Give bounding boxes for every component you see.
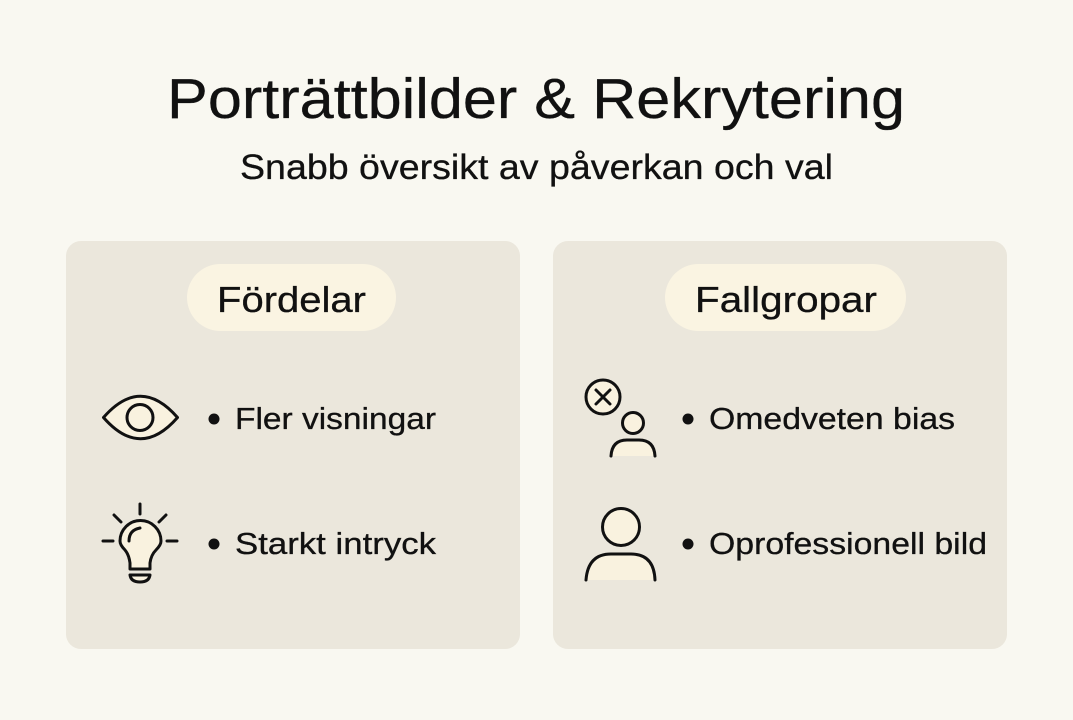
item: Omedveten bias: Omedveten bias <box>709 401 955 436</box>
heading: Fallgropar <box>665 264 906 331</box>
panel: Fallgropar <box>553 241 1007 649</box>
icon: eye <box>104 396 178 439</box>
icon: person <box>586 508 655 580</box>
subtitle: Snabb översikt av påverkan och val <box>240 148 833 187</box>
icon: light bulb <box>103 504 177 582</box>
panel: Fördelar <box>66 241 520 649</box>
item: Starkt intryck: Starkt intryck <box>235 526 437 561</box>
item: Fler visningar: Fler visningar <box>235 401 436 436</box>
heading: Fallgropar: Fallgropar <box>695 279 877 320</box>
title: Porträttbilder & Rekrytering <box>167 67 905 131</box>
heading: Fördelar: Fördelar <box>217 279 366 320</box>
icon: rejected person <box>586 380 655 456</box>
item: Oprofessionell bild: Oprofessionell bild <box>709 526 987 561</box>
heading: Fördelar <box>187 264 396 331</box>
